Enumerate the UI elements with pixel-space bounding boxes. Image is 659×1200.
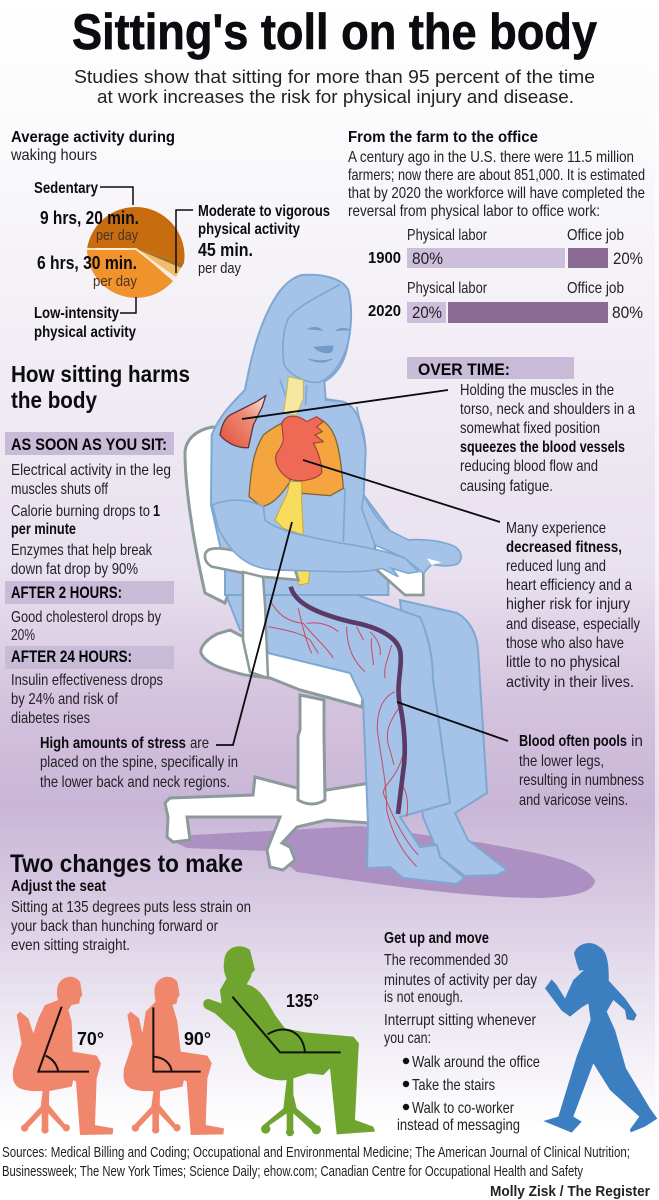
- chair backrest: [185, 427, 240, 603]
- pie labels: 9 hrs, 20 min.: [40, 208, 139, 228]
- panel: get up and move: Walk around the office: [412, 1054, 540, 1071]
- as soon as you sit: [5, 432, 174, 578]
- after 24 hours: Insulin effectiveness drops: [11, 672, 163, 689]
- panel: get up and move: The recommended 30: [384, 952, 508, 969]
- heading: [10, 129, 175, 164]
- upper spine: [283, 377, 303, 415]
- near leg and boot: [225, 570, 464, 884]
- callout: stress on the spine: High amounts of stress: [40, 735, 186, 752]
- bar chart 2020: 20%: [412, 303, 442, 322]
- subtitle: Studies show that sitting for more than 95 percent of the time: [74, 67, 595, 87]
- panel: how sitting harms the body: [5, 361, 190, 727]
- pie labels: Low-intensity: [34, 305, 119, 322]
- adjust the seat text: Adjust the seat: [11, 878, 107, 895]
- pie labels: per day: [198, 260, 241, 277]
- as soon as you sit: 1: [153, 503, 160, 520]
- after 24 hours: [5, 646, 174, 727]
- leader lines: [216, 390, 508, 745]
- callout: blood pools: the lower legs,: [519, 753, 604, 770]
- pie labels: per day: [96, 227, 138, 244]
- over time text: Holding the muscles in the: [460, 382, 614, 399]
- callout: over time: [407, 357, 635, 495]
- callout: decreased fitness: [506, 520, 640, 691]
- body text: reversal from physical labor to office work:: [348, 203, 600, 220]
- near arm and hand: [212, 500, 418, 577]
- bar chart 1900: Office job: [567, 227, 624, 244]
- bar chart 2020: Office job: [567, 280, 624, 297]
- over time text: causing fatigue.: [460, 478, 553, 495]
- illustration: seated woman in chair: [165, 275, 507, 884]
- bar chart 1900: Physical labor: [407, 227, 488, 244]
- bar chart 1900: 80%: [412, 249, 443, 268]
- face features: [308, 327, 350, 362]
- figure: 135 degrees: [203, 946, 375, 1136]
- after 2 hours: [5, 581, 174, 644]
- callout: decreased fitness: decreased fitness,: [506, 539, 622, 556]
- shoulder muscle: [220, 396, 266, 448]
- pie chart: [87, 207, 185, 298]
- callout: decreased fitness: Many experience: [506, 520, 606, 537]
- panel: get up and move: is not enough.: [384, 989, 463, 1006]
- pie leader lines: [100, 187, 193, 313]
- dark vein: [291, 587, 405, 814]
- chair seat: [201, 630, 364, 707]
- panel: get up and move: Walk to co-worker: [412, 1100, 515, 1117]
- panel: get up and move: you can:: [384, 1030, 431, 1047]
- callout: stress on the spine: are: [190, 735, 209, 752]
- adjust the seat text: even sitting straight.: [11, 937, 130, 954]
- callout: decreased fitness: heart efficiency and a: [506, 577, 632, 594]
- chair base and wheels: [165, 777, 370, 870]
- panel: get up and move: Interrupt sitting whenever: [384, 1012, 537, 1029]
- lower spine: [275, 482, 310, 585]
- callout: blood pools: [519, 733, 644, 809]
- bar chart 1900: 20%: [613, 249, 643, 268]
- after 24 hours: AFTER 24 HOURS:: [11, 647, 132, 666]
- arms and armrests: [205, 495, 461, 595]
- as soon as you sit: Calorie burning drops to: [11, 503, 150, 520]
- leg veins: [268, 587, 418, 867]
- callout: stress on the spine: placed on the spine, specifically in: [40, 754, 238, 771]
- bar chart 1900: [368, 227, 643, 268]
- as soon as you sit: down fat drop by 90%: [11, 561, 138, 578]
- figure: 90 degrees: 90°: [184, 1029, 211, 1049]
- callout: decreased fitness: reduced lung and: [506, 558, 606, 575]
- panel: average activity: [10, 129, 330, 341]
- pie labels: physical activity: [34, 324, 136, 341]
- pie labels: Sedentary: [34, 180, 98, 197]
- callout: blood pools: in: [631, 733, 643, 750]
- panel: get up and move: Get up and move: [384, 930, 489, 947]
- bar chart 2020: 80%: [612, 303, 643, 322]
- adjust the seat text: Sitting at 135 degrees puts less strain on: [11, 899, 251, 916]
- sources: [2, 1144, 630, 1180]
- adjust the seat text: [11, 878, 251, 954]
- bar chart 2020: 2020: [368, 303, 401, 320]
- far arm and hand: [362, 495, 461, 573]
- panel: get up and move: instead of messaging: [397, 1117, 520, 1134]
- subtitle: [74, 67, 595, 107]
- over time text: somewhat fixed position: [460, 420, 600, 437]
- panel: get up and move: Take the stairs: [412, 1077, 495, 1094]
- as soon as you sit: Electrical activity in the leg: [11, 462, 171, 479]
- chair column: [298, 695, 325, 804]
- section heading: Two changes to make: [10, 850, 243, 878]
- panel: from the farm to the office: [348, 129, 645, 323]
- pie labels: physical activity: [198, 221, 300, 238]
- near armrest: [205, 548, 298, 580]
- panel: get up and move: minutes of activity per day: [384, 972, 537, 989]
- over time text: reducing blood flow and: [460, 458, 598, 475]
- callout: decreased fitness: little to no physical: [506, 654, 620, 671]
- callout: decreased fitness: those who also have: [506, 635, 624, 652]
- pie labels: 6 hrs, 30 min.: [37, 253, 137, 273]
- adjust the seat text: your back than hunching forward or: [11, 918, 219, 935]
- callout: stress on the spine: [40, 735, 238, 791]
- heading: waking hours: [10, 147, 97, 164]
- as soon as you sit: AS SOON AS YOU SIT:: [11, 435, 167, 454]
- over time text: [460, 382, 635, 495]
- after 24 hours: by 24% and risk of: [11, 691, 118, 708]
- over time heading: OVER TIME:: [418, 360, 510, 379]
- heading: Average activity during: [11, 129, 175, 146]
- panel: get up and move: [384, 930, 540, 1134]
- title: Sitting's toll on the body: [72, 4, 597, 60]
- panel: two changes to make: [10, 850, 375, 1136]
- icon: walking woman: [543, 943, 657, 1133]
- pie labels: [34, 180, 330, 341]
- heading: From the farm to the office: [348, 129, 538, 146]
- pie labels: per day: [93, 273, 137, 290]
- callout: blood pools: and varicose veins.: [519, 792, 628, 809]
- far leg and boot: [400, 600, 507, 876]
- after 2 hours: AFTER 2 HOURS:: [11, 583, 122, 602]
- far armrest: [375, 535, 423, 595]
- as soon as you sit: Enzymes that help break: [11, 542, 153, 559]
- lungs: [249, 418, 343, 507]
- heart: [276, 416, 323, 481]
- after 2 hours: Good cholesterol drops by: [11, 609, 161, 626]
- over time heading: [407, 357, 574, 379]
- as soon as you sit: per minute: [11, 521, 76, 538]
- pie labels: 45 min.: [198, 240, 253, 260]
- bar chart 2020: [368, 280, 643, 323]
- section heading: [11, 361, 190, 413]
- figure: 90 degrees: [124, 977, 224, 1135]
- section heading: the body: [11, 387, 97, 413]
- after 24 hours: diabetes rises: [11, 710, 90, 727]
- internal organs: [220, 377, 343, 585]
- bar chart 1900: 1900: [368, 250, 401, 267]
- figure: 135 degrees: 135°: [286, 991, 319, 1011]
- section heading: How sitting harms: [11, 361, 190, 387]
- after 2 hours: 20%: [11, 627, 35, 644]
- callout: stress on the spine: the lower back and neck regions.: [40, 774, 230, 791]
- callout: decreased fitness: higher risk for injury: [506, 596, 630, 613]
- as soon as you sit: muscles shuts off: [11, 481, 108, 498]
- hand highlight: [427, 558, 442, 565]
- callout: blood pools: Blood often pools: [519, 733, 627, 750]
- body text: [348, 149, 645, 220]
- figure: 70 degrees: 70°: [77, 1029, 104, 1049]
- floor shadow: [170, 826, 595, 898]
- torso and hair: [211, 275, 388, 595]
- figure: 70 degrees: [13, 977, 113, 1135]
- callout: decreased fitness: activity in their lives.: [506, 674, 634, 691]
- pie labels: Moderate to vigorous: [198, 203, 330, 220]
- armrest support: [243, 572, 268, 678]
- red capillaries: [268, 600, 418, 867]
- subtitle: at work increases the risk for physical injury and disease.: [97, 87, 574, 107]
- bar chart 2020: Physical labor: [407, 280, 488, 297]
- face outline: [280, 284, 366, 542]
